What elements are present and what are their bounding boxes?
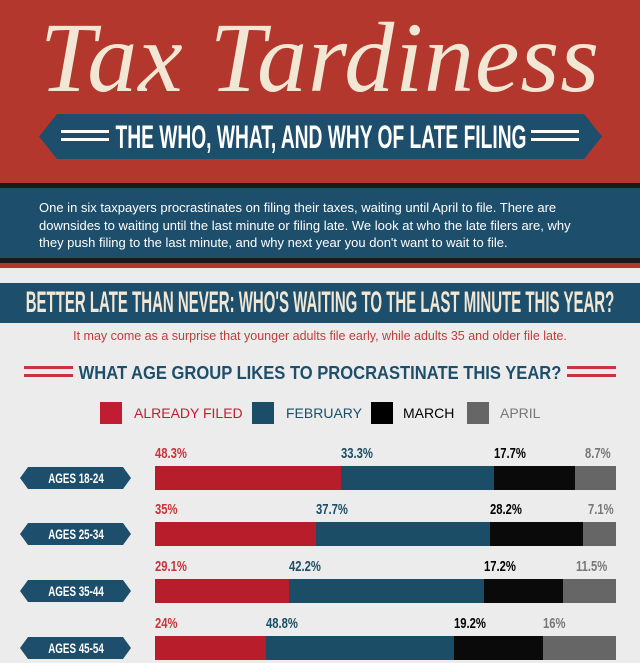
text: they push filing to the last minute, and why next year you don't want to wait to file. <box>39 235 508 250</box>
section heading band: BETTER LATE THAN NEVER: WHO'S WAITING TO THE LAST MINUTE THIS YEAR? <box>26 286 614 319</box>
row 18-24: 48.3% <box>155 445 187 462</box>
intro band <box>0 183 640 263</box>
row 25-34: 28.2% <box>490 501 522 518</box>
row 45-54: 24% <box>155 615 178 632</box>
legend: ALREADY FILED <box>134 405 243 421</box>
subtitle ribbon <box>39 114 602 159</box>
row 25-34: AGES 25-34 <box>48 526 103 542</box>
row 35-44: AGES 35-44 <box>48 583 103 599</box>
title: Tax Tardiness <box>40 2 600 113</box>
row 18-24: AGES 18-24 <box>48 470 103 486</box>
row 18-24: 17.7% <box>494 445 526 462</box>
row 18-24: 8.7% <box>585 445 611 462</box>
legend: MARCH <box>403 405 454 421</box>
legend: FEBRUARY <box>286 405 362 421</box>
row 25-34: 35% <box>155 501 178 518</box>
row 35-44: 11.5% <box>576 558 607 575</box>
row 35-44 <box>20 558 616 603</box>
row 35-44: 42.2% <box>289 558 321 575</box>
header background <box>0 0 640 183</box>
row 45-54 <box>20 615 616 660</box>
text: One in six taxpayers procrastinates on filing their taxes, waiting until April to file. There are <box>39 200 556 215</box>
subtitle ribbon: THE WHO, WHAT, AND WHY OF LATE FILING <box>115 119 526 155</box>
row 45-54: 19.2% <box>454 615 486 632</box>
row 25-34: 37.7% <box>316 501 348 518</box>
section subtitle: It may come as a surprise that younger adults file early, while adults 35 and older file late. <box>73 329 567 343</box>
row 45-54: 16% <box>543 615 566 632</box>
row 35-44: 17.2% <box>484 558 516 575</box>
row 45-54: AGES 45-54 <box>48 640 103 656</box>
row 45-54: 48.8% <box>266 615 298 632</box>
row 35-44: 29.1% <box>155 558 187 575</box>
legend <box>100 402 540 424</box>
row 25-34 <box>20 501 616 546</box>
legend: APRIL <box>500 405 540 421</box>
row 18-24 <box>20 445 616 490</box>
row 18-24: 33.3% <box>341 445 373 462</box>
chart heading: WHAT AGE GROUP LIKES TO PROCRASTINATE THIS YEAR? <box>79 363 561 383</box>
text: downsides to waiting until the last minute or filing late. We look at who the late filers are, why <box>39 218 571 232</box>
row 25-34: 7.1% <box>588 501 614 518</box>
